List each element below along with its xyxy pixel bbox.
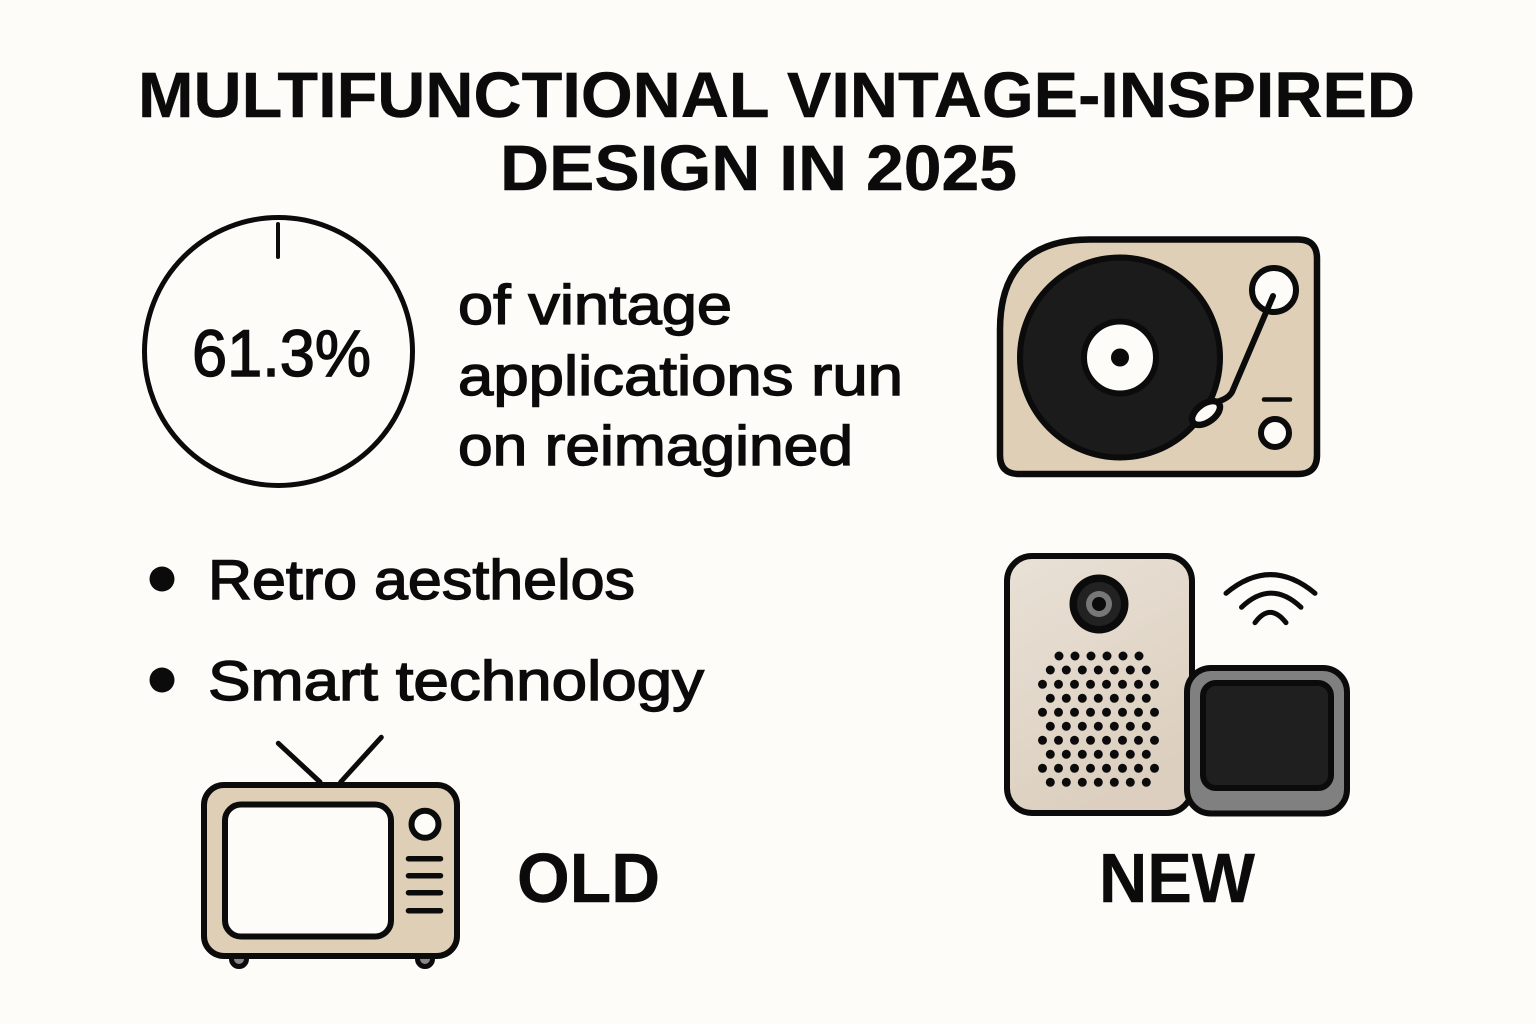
label: NEW: NEW xyxy=(1099,839,1255,917)
stat description: on reimagined xyxy=(458,414,853,477)
icon: smart speaker xyxy=(1007,556,1192,813)
bullet list: Retro aesthelos xyxy=(208,548,635,611)
stat gauge: 61.3%: 61.3% xyxy=(192,316,371,390)
stat gauge: 61.3% xyxy=(144,218,412,486)
label: OLD: OLD xyxy=(517,839,660,917)
title: MULTIFUNCTIONAL VINTAGE-INSPIRED xyxy=(138,59,1415,131)
stat description xyxy=(458,273,903,477)
title: DESIGN IN 2025 xyxy=(500,132,1017,204)
icon: turntable xyxy=(1000,240,1317,474)
stat description: of vintage xyxy=(458,273,732,336)
stat description: applications run xyxy=(458,344,903,407)
bullet list: Smart technology xyxy=(208,649,704,712)
title xyxy=(138,59,1415,204)
icon: wifi signal xyxy=(1226,575,1315,623)
bullet list xyxy=(150,548,704,712)
icon: retro television xyxy=(204,737,457,966)
icon: smart display xyxy=(1187,668,1347,814)
